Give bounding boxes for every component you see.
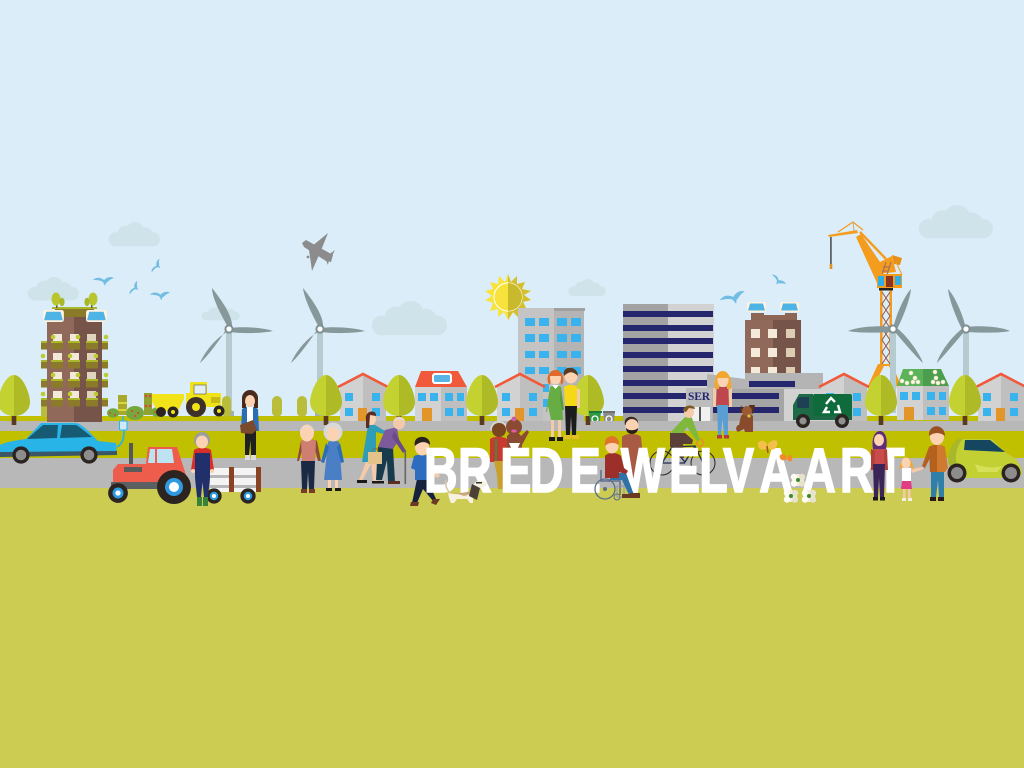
person: man in wheelchair	[595, 436, 640, 500]
birds	[93, 258, 786, 308]
trees	[0, 375, 981, 425]
green verge	[0, 431, 1024, 458]
wind turbines (right pair)	[848, 289, 1010, 413]
tree trunks over road	[12, 420, 967, 425]
ground strip	[0, 416, 1024, 422]
person: old man	[297, 424, 321, 493]
green recycling truck	[793, 394, 852, 428]
dog: brown	[736, 405, 755, 432]
person: old woman	[321, 422, 344, 491]
person: teal woman helping	[357, 411, 385, 484]
houses	[338, 369, 1024, 421]
person: woman with purple hijab	[871, 431, 888, 500]
person: woman with bag	[240, 390, 259, 460]
white flowers	[784, 474, 816, 503]
person: cyclist	[650, 405, 715, 475]
sky	[0, 0, 1024, 420]
sun	[485, 274, 531, 320]
foreground lawn	[0, 488, 1024, 768]
person: man in orange	[922, 426, 948, 501]
hedges	[41, 396, 307, 417]
grey apartment building	[518, 308, 585, 421]
person: girl	[899, 457, 923, 501]
brown building with solar panels	[745, 302, 801, 376]
person: woman in red top	[713, 371, 732, 438]
upper road	[0, 421, 1024, 431]
person: man in yellow	[564, 368, 580, 439]
SER sign: SER	[688, 391, 711, 403]
lower road	[0, 458, 1024, 488]
recycling bins	[589, 411, 615, 427]
wind turbines (left pair)	[200, 288, 365, 416]
red tractor with trailer	[108, 443, 261, 504]
green balcony building	[41, 292, 108, 422]
person: farmer	[191, 432, 214, 506]
dog: basset	[446, 480, 487, 503]
butterflies	[758, 440, 792, 462]
yellow tractor	[152, 382, 224, 418]
blue electric car	[0, 416, 127, 464]
berry bushes and crates	[107, 393, 163, 420]
crane	[828, 222, 902, 388]
striped office tower	[623, 304, 714, 422]
person: elderly man with cane	[368, 416, 406, 484]
person: bearded man	[622, 417, 643, 480]
person: woman in green	[546, 370, 564, 441]
SER building	[686, 373, 823, 423]
title: BREDE WELVAART	[424, 435, 905, 506]
person: boy in blue	[410, 437, 440, 506]
person: child with headphones and baby	[490, 417, 529, 489]
green smart car	[948, 439, 1022, 482]
airplane	[302, 233, 335, 271]
clouds	[28, 205, 993, 335]
